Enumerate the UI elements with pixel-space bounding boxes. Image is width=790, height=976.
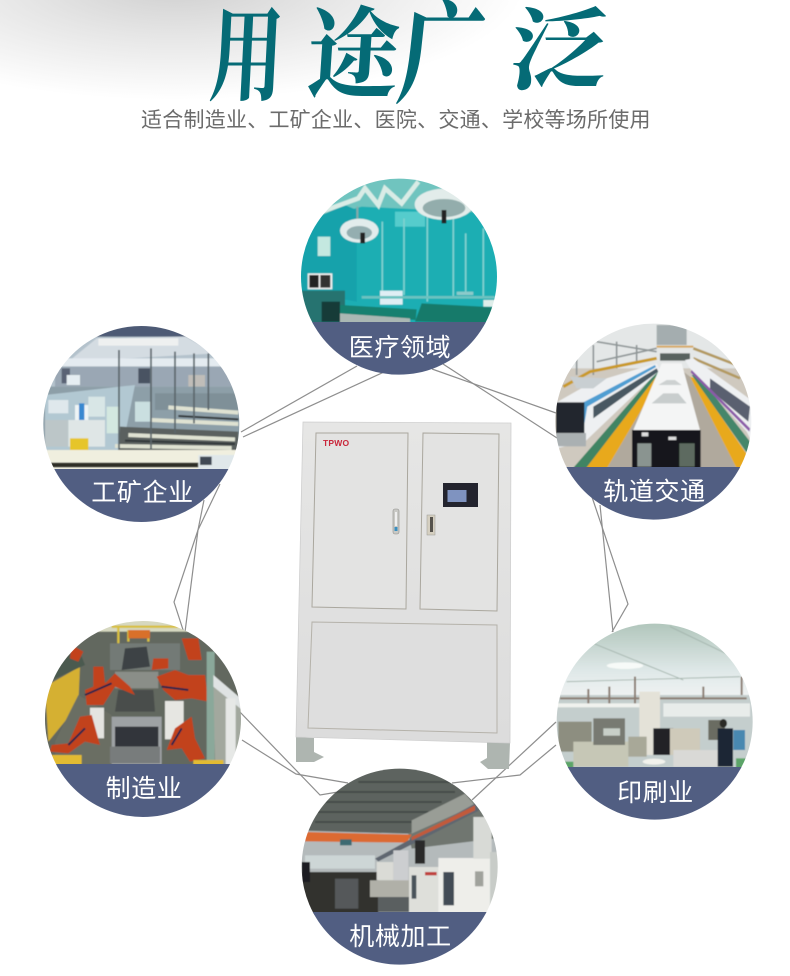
photo: robot line [45, 621, 241, 768]
white machines [377, 862, 393, 880]
brand logo: TPWO [323, 438, 349, 448]
label band [56, 764, 230, 817]
photo: operating room [301, 178, 497, 327]
label: 工矿企业: 工矿企业 [91, 479, 194, 507]
panel: rail transit [555, 324, 752, 520]
panel: manufacturing [45, 621, 241, 817]
label band [54, 469, 228, 522]
cabinet body [296, 422, 511, 743]
right door handle [427, 515, 435, 535]
lower panel [308, 622, 497, 733]
right door [420, 433, 499, 611]
label: 机械加工: 机械加工 [349, 923, 452, 951]
panel: machining [302, 768, 498, 965]
photo: train depot [555, 324, 752, 472]
label band [312, 322, 486, 375]
poles [119, 348, 208, 452]
panel: medical [301, 178, 497, 375]
photo: machine hall [295, 762, 505, 915]
left train [557, 363, 660, 448]
label: 轨道交通: 轨道交通 [603, 478, 706, 506]
machines [558, 722, 592, 752]
label band [312, 912, 486, 965]
control screen [443, 483, 478, 507]
title [207, 0, 613, 119]
product: cabinet [296, 422, 511, 769]
title: 用 [207, 2, 287, 116]
depot floor strips [573, 372, 658, 467]
cabinet legs [296, 737, 510, 769]
label: 印刷业: 印刷业 [617, 779, 694, 807]
left door [312, 433, 408, 609]
panel: printing [556, 624, 753, 820]
worker [720, 719, 727, 728]
panel: industry and mining [43, 326, 240, 522]
machines [45, 385, 135, 452]
label: 制造业: 制造业 [106, 775, 182, 803]
left door handle [393, 509, 399, 534]
center train [633, 363, 700, 430]
frame and columns [207, 652, 215, 765]
label band [568, 767, 742, 820]
right train [685, 358, 753, 445]
label: 医疗领域: 医疗领域 [349, 334, 451, 362]
robot arms [50, 638, 208, 762]
title: 途 [304, 1, 405, 112]
subtitle: 适合制造业、工矿企业、医院、交通、学校等场所使用 [141, 109, 651, 132]
connecting lines [174, 364, 628, 800]
label band [566, 467, 740, 520]
title: 泛 [505, 2, 613, 102]
photo: print workshop [556, 624, 753, 769]
background top shading [0, 0, 525, 100]
photo: factory floor [43, 326, 240, 469]
